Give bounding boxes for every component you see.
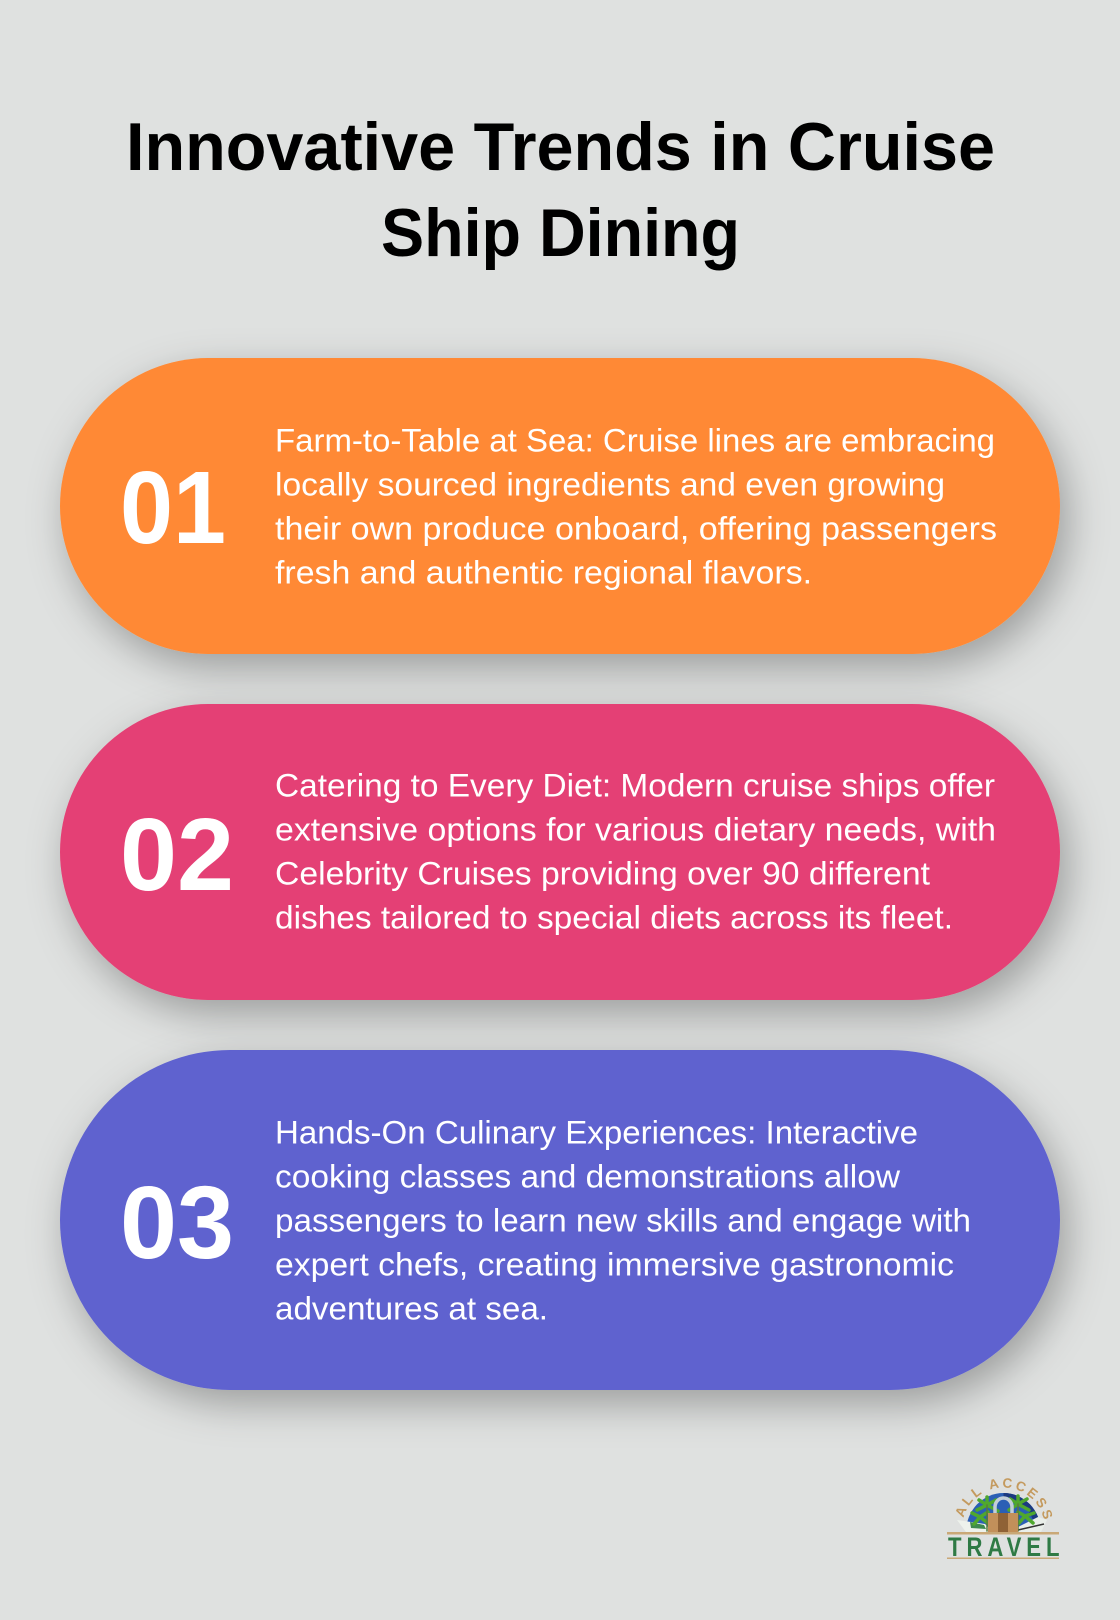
icon: palm trees xyxy=(972,1496,1034,1531)
decorative rule top xyxy=(947,1532,1059,1534)
text block: culinary experiences: passengers to learn new skills and engage with xyxy=(275,1202,971,1238)
panel: step 02 every diet xyxy=(60,704,1060,1000)
text block: culinary experiences: Hands-On Culinary Experiences: Interactive xyxy=(275,1114,918,1150)
text block: culinary experiences: cooking classes and demonstrations allow xyxy=(275,1158,901,1194)
pill background pink xyxy=(60,704,1060,1000)
panel: step 01 farm-to-table xyxy=(60,358,1060,654)
text block: farm-to-table: their own produce onboard, offering passengers xyxy=(275,510,997,546)
pill background orange xyxy=(60,358,1060,654)
pill background blue xyxy=(60,1050,1060,1390)
text block: culinary experiences: expert chefs, creating immersive gastronomic xyxy=(275,1246,954,1282)
text block: farm-to-table: Farm-to-Table at Sea: Cruise lines are embracing xyxy=(275,422,995,458)
text block: farm-to-table: locally sourced ingredients and even growing xyxy=(275,466,945,502)
title: Ship Dining xyxy=(381,195,740,271)
text block: every diet: Celebrity Cruises providing over 90 different xyxy=(275,856,930,892)
number 03: 03 xyxy=(120,1165,234,1280)
text block: every diet: dishes tailored to special diets across its fleet. xyxy=(275,900,953,936)
text block: culinary experiences xyxy=(275,1114,971,1326)
text block: every diet: extensive options for various dietary needs, with xyxy=(275,812,996,848)
text block: farm-to-table: fresh and authentic regional flavors. xyxy=(275,554,812,590)
icon: blue dome xyxy=(966,1493,1041,1532)
text block: farm-to-table xyxy=(275,422,997,590)
title xyxy=(126,109,995,271)
panel: step 03 culinary experiences xyxy=(60,1050,1060,1390)
text block: every diet xyxy=(275,768,996,936)
title: Innovative Trends in Cruise xyxy=(126,109,995,185)
text block: culinary experiences: adventures at sea. xyxy=(275,1290,548,1326)
number 01: 01 xyxy=(120,450,226,565)
icon: padlock xyxy=(995,1498,1012,1515)
decorative rule bottom xyxy=(947,1558,1059,1559)
logo: All Access Travel: ALL ACCESS xyxy=(956,1478,1052,1519)
text: all access arc xyxy=(964,1488,1044,1518)
text block: every diet: Catering to Every Diet: Modern cruise ships offer xyxy=(275,768,995,804)
icon: boats xyxy=(957,1520,993,1532)
text: travel: TRAVEL xyxy=(948,1533,1060,1563)
logo: All Access Travel xyxy=(947,1478,1060,1563)
number 02: 02 xyxy=(120,797,234,912)
